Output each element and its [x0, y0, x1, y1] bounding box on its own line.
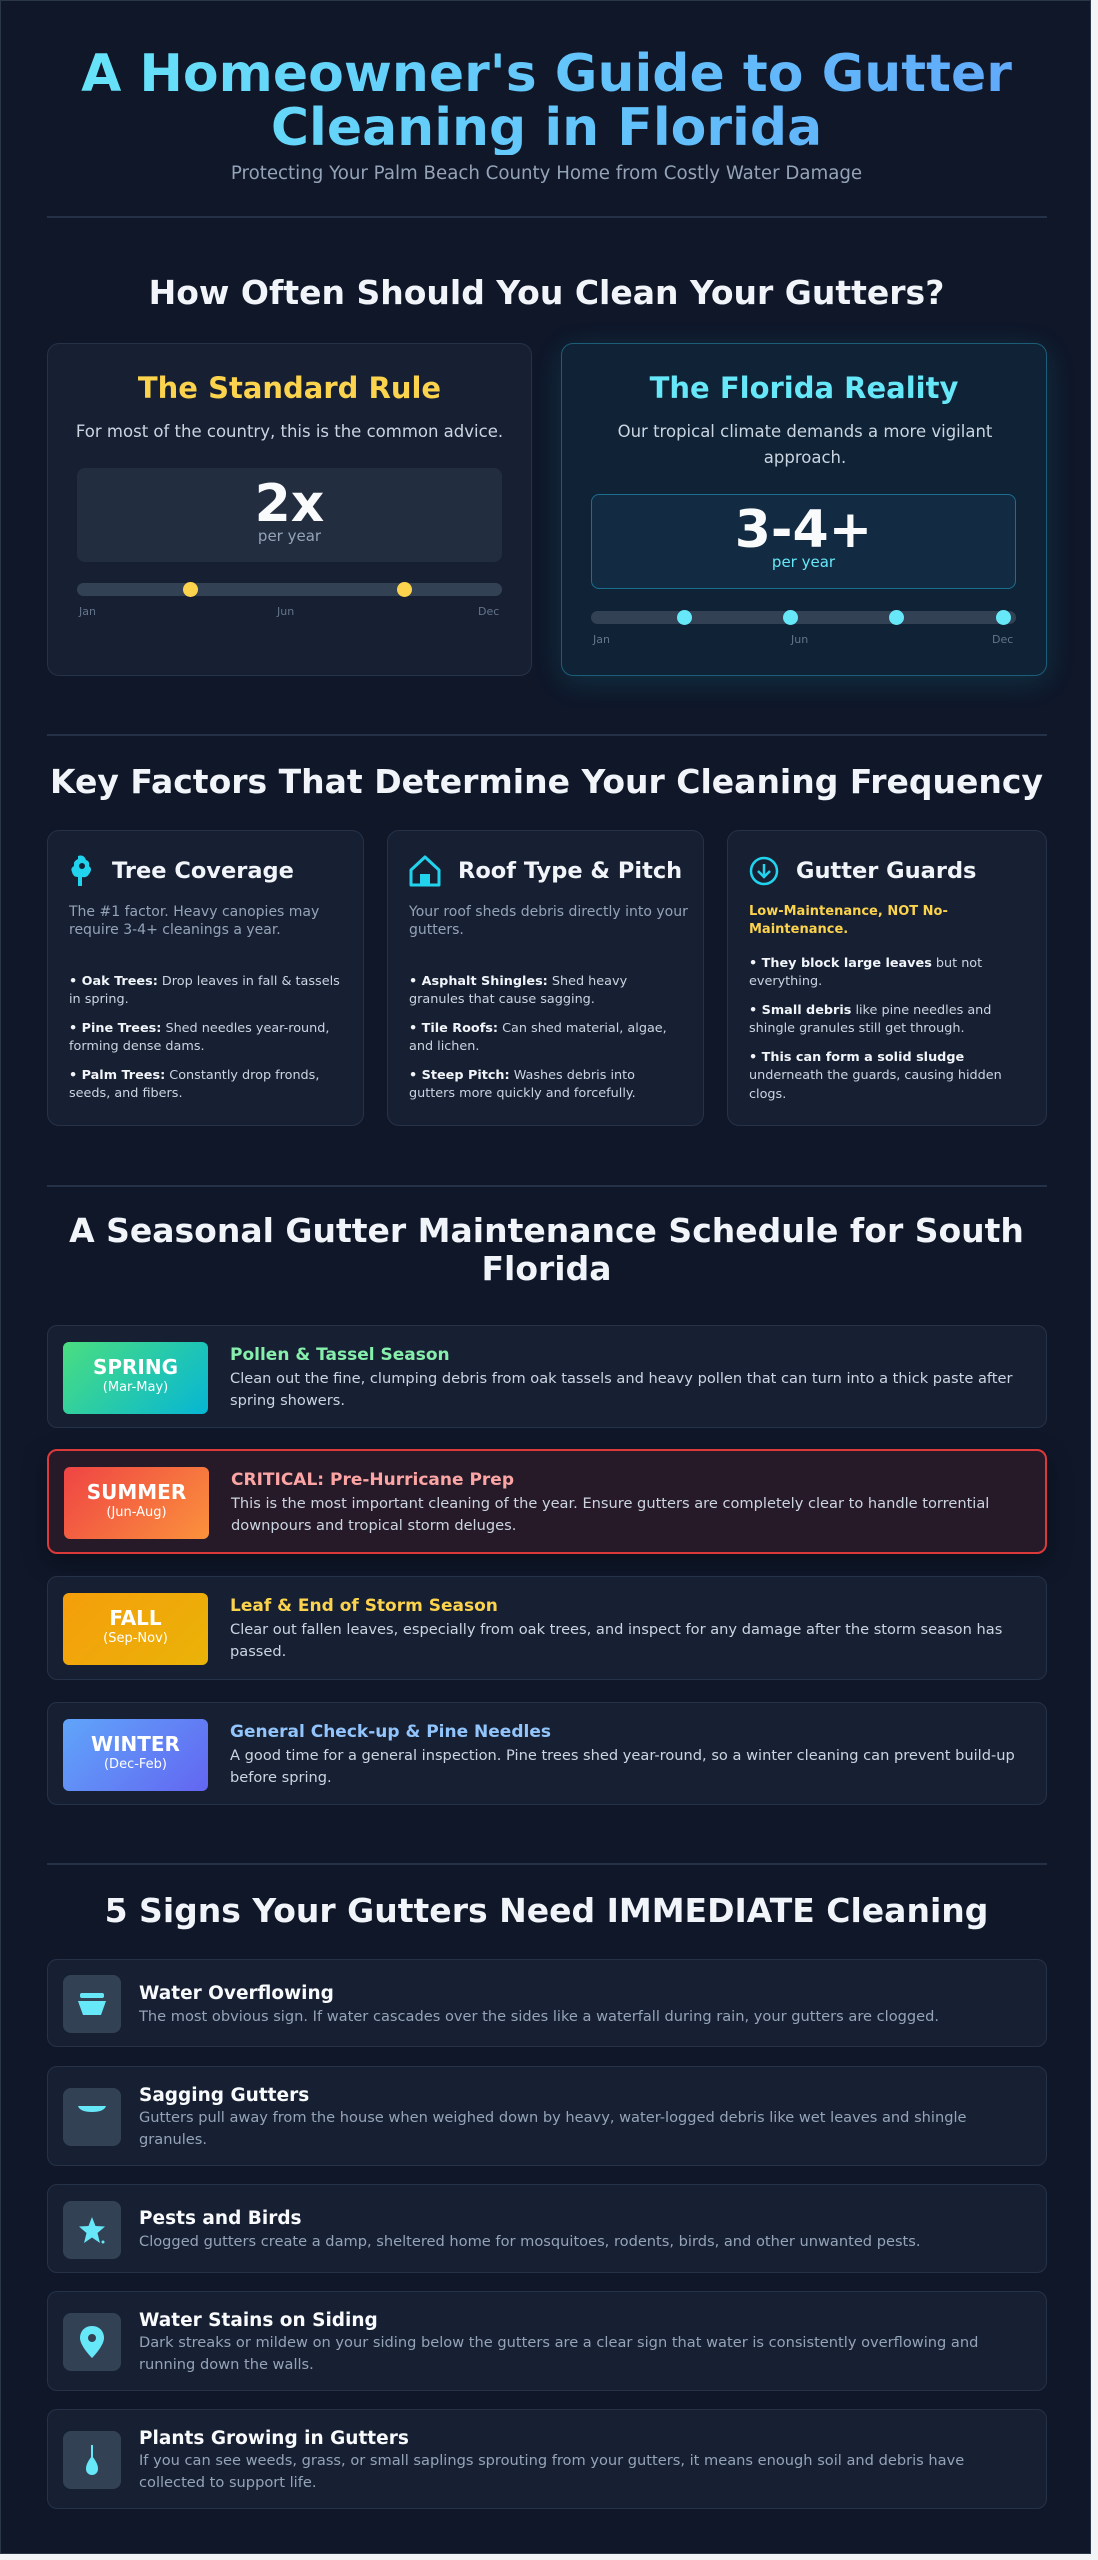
heading: seasonal schedule: A Seasonal Gutter Maintenance Schedule for South: [69, 1211, 1024, 1250]
icon: sagging: [63, 2088, 121, 2146]
florida title: The Florida Reality: [650, 371, 958, 405]
spring title: Pollen & Tassel Season: [230, 1345, 450, 1365]
desc: If you can see weeds, grass, or small saplings sprouting from your gutters, it means enough soil and debris have collected to support life.: [139, 2452, 964, 2491]
winter desc: A good time for a general inspection. Pine trees shed year-round, so a winter cleaning can prevent build-up before spring.: [230, 1747, 1015, 1786]
sign: pests: [47, 2184, 1047, 2273]
badge spring: [63, 1342, 208, 1414]
panel: florida reality: [561, 343, 1047, 676]
fall title: Leaf & End of Storm Season: [230, 1596, 498, 1616]
heading: seasonal schedule: [69, 1211, 1024, 1288]
panel: florida reality: Dec: [992, 633, 1013, 646]
heading: seasonal schedule: Florida: [481, 1249, 612, 1288]
icon: overflow: [63, 1975, 121, 2033]
subtitle: Protecting Your Palm Beach County Home from Costly Water Damage: [231, 163, 862, 184]
title: A Homeowner's Guide to Gutter: [81, 44, 1012, 104]
spring desc: Clean out the fine, clumping debris from oak tassels and heavy pollen that can turn into a thick paste after spring showers.: [230, 1370, 1012, 1409]
sign: sagging: [47, 2066, 1047, 2166]
sign: water overflowing: [47, 1959, 1047, 2047]
panel: standard rule: [47, 343, 532, 676]
sign: plants: [47, 2409, 1047, 2509]
guards bullets: • They block large leaves but not everything.: [749, 956, 982, 989]
panel: gutter guards: [727, 830, 1047, 1126]
badge fall: FALL: [109, 1606, 162, 1630]
panel: standard rule: Dec: [478, 605, 499, 618]
heading: 5 signs: 5 Signs Your Gutters Need IMMEDIATE Cleaning: [105, 1891, 988, 1930]
panel: gutter guards: • This can form a solid sludge underneath the guards, causing hidden clogs.: [749, 1050, 1002, 1102]
standard desc: For most of the country, this is the common advice.: [76, 422, 503, 441]
timeline standard: [77, 583, 502, 596]
sign: water stains: [47, 2291, 1047, 2391]
badge winter: WINTER: [91, 1732, 180, 1756]
standard title: The Standard Rule: [138, 371, 441, 405]
badge winter: [63, 1719, 208, 1791]
title: Pests and Birds: [139, 2208, 302, 2229]
guards warning: Low-Maintenance, NOT No-Maintenance.: [749, 904, 948, 937]
desc: Dark streaks or mildew on your siding below the gutters are a clear sign that water is consistently overflowing and running down the walls.: [139, 2334, 978, 2373]
tree title with icon: [71, 856, 294, 886]
summer desc: This is the most important cleaning of the year. Ensure gutters are completely clear to handle torrential downpours and tropical storm deluges.: [231, 1495, 989, 1534]
badge summer: SUMMER: [87, 1480, 186, 1504]
panel: tree coverage: [47, 830, 364, 1126]
icon: pin: [63, 2313, 121, 2371]
season: winter: [47, 1702, 1047, 1805]
panel: roof type: • Steep Pitch: Washes debris into gutters more quickly and forcefully.: [409, 1068, 636, 1101]
season: spring: [47, 1325, 1047, 1428]
fall desc: Clear out fallen leaves, especially from oak trees, and inspect for any damage after the storm season has passed.: [230, 1621, 1002, 1660]
panel: standard rule: Jun: [277, 605, 294, 618]
season: fall: [47, 1576, 1047, 1680]
title: Water Overflowing: [139, 1983, 334, 2004]
stat box 3-4+: per year: [772, 553, 835, 571]
title: Water Stains on Siding: [139, 2310, 378, 2331]
title: [1, 47, 1092, 155]
badge fall: (Sep-Nov): [103, 1631, 168, 1646]
badge winter: (Dec-Feb): [104, 1757, 167, 1772]
panel: florida reality: Jan: [593, 633, 610, 646]
guards title with icon: Gutter Guards: [796, 858, 976, 884]
stat box 3-4+: [591, 494, 1016, 589]
roof bullets: • Asphalt Shingles: Shed heavy granules that cause sagging.: [409, 974, 627, 1007]
icon: sprout drop: [63, 2431, 121, 2489]
tree title with icon: Tree Coverage: [112, 858, 294, 884]
badge spring: (Mar-May): [103, 1380, 168, 1395]
stat box 2x: per year: [258, 527, 321, 545]
tree bullets: • Oak Trees: Drop leaves in fall & tassels in spring.: [69, 974, 340, 1007]
desc: Gutters pull away from the house when weighed down by heavy, water-logged debris like wet leaves and shingle granules.: [139, 2109, 967, 2148]
roof title with icon: [410, 855, 682, 886]
panel: florida reality: Jun: [791, 633, 808, 646]
stat box 3-4+: 3-4+: [735, 500, 872, 560]
badge spring: SPRING: [93, 1355, 178, 1379]
desc: Clogged gutters create a damp, sheltered home for mosquitoes, rodents, birds, and other unwanted pests.: [139, 2233, 921, 2250]
heading: key factors: Key Factors That Determine Your Cleaning Frequency: [50, 762, 1043, 801]
florida desc: Our tropical climate demands a more vigilant approach.: [618, 422, 992, 467]
panel: standard rule: Jan: [79, 605, 96, 618]
badge summer: (Jun-Aug): [106, 1505, 167, 1520]
summer title: CRITICAL: Pre-Hurricane Prep: [231, 1470, 514, 1490]
stat box 2x: 2x: [255, 474, 324, 534]
roof desc: Your roof sheds debris directly into your gutters.: [409, 904, 688, 938]
panel: tree coverage: • Pine Trees: Shed needles year-round, forming dense dams.: [69, 1021, 329, 1054]
icon: star: [63, 2201, 121, 2259]
season: summer: [47, 1449, 1047, 1554]
panel: roof type: [387, 830, 704, 1126]
winter title: General Check-up & Pine Needles: [230, 1722, 551, 1742]
title: Sagging Gutters: [139, 2085, 309, 2106]
badge summer: [64, 1467, 209, 1539]
panel: gutter guards: • Small debris like pine needles and shingle granules still get through.: [749, 1003, 991, 1036]
title: Plants Growing in Gutters: [139, 2428, 409, 2449]
roof title with icon: Roof Type & Pitch: [458, 858, 682, 884]
badge fall: [63, 1593, 208, 1665]
stat box 2x: [77, 468, 502, 562]
timeline florida: [591, 611, 1016, 624]
tree desc: The #1 factor. Heavy canopies may require 3-4+ cleanings a year.: [69, 904, 319, 938]
heading: how often: How Often Should You Clean Your Gutters?: [149, 273, 944, 312]
panel: tree coverage: • Palm Trees: Constantly drop fronds, seeds, and fibers.: [69, 1068, 319, 1101]
title: Cleaning in Florida: [271, 98, 822, 158]
panel: roof type: • Tile Roofs: Can shed material, algae, and lichen.: [409, 1021, 667, 1054]
desc: The most obvious sign. If water cascades over the sides like a waterfall during rain, your gutters are clogged.: [139, 2008, 939, 2025]
